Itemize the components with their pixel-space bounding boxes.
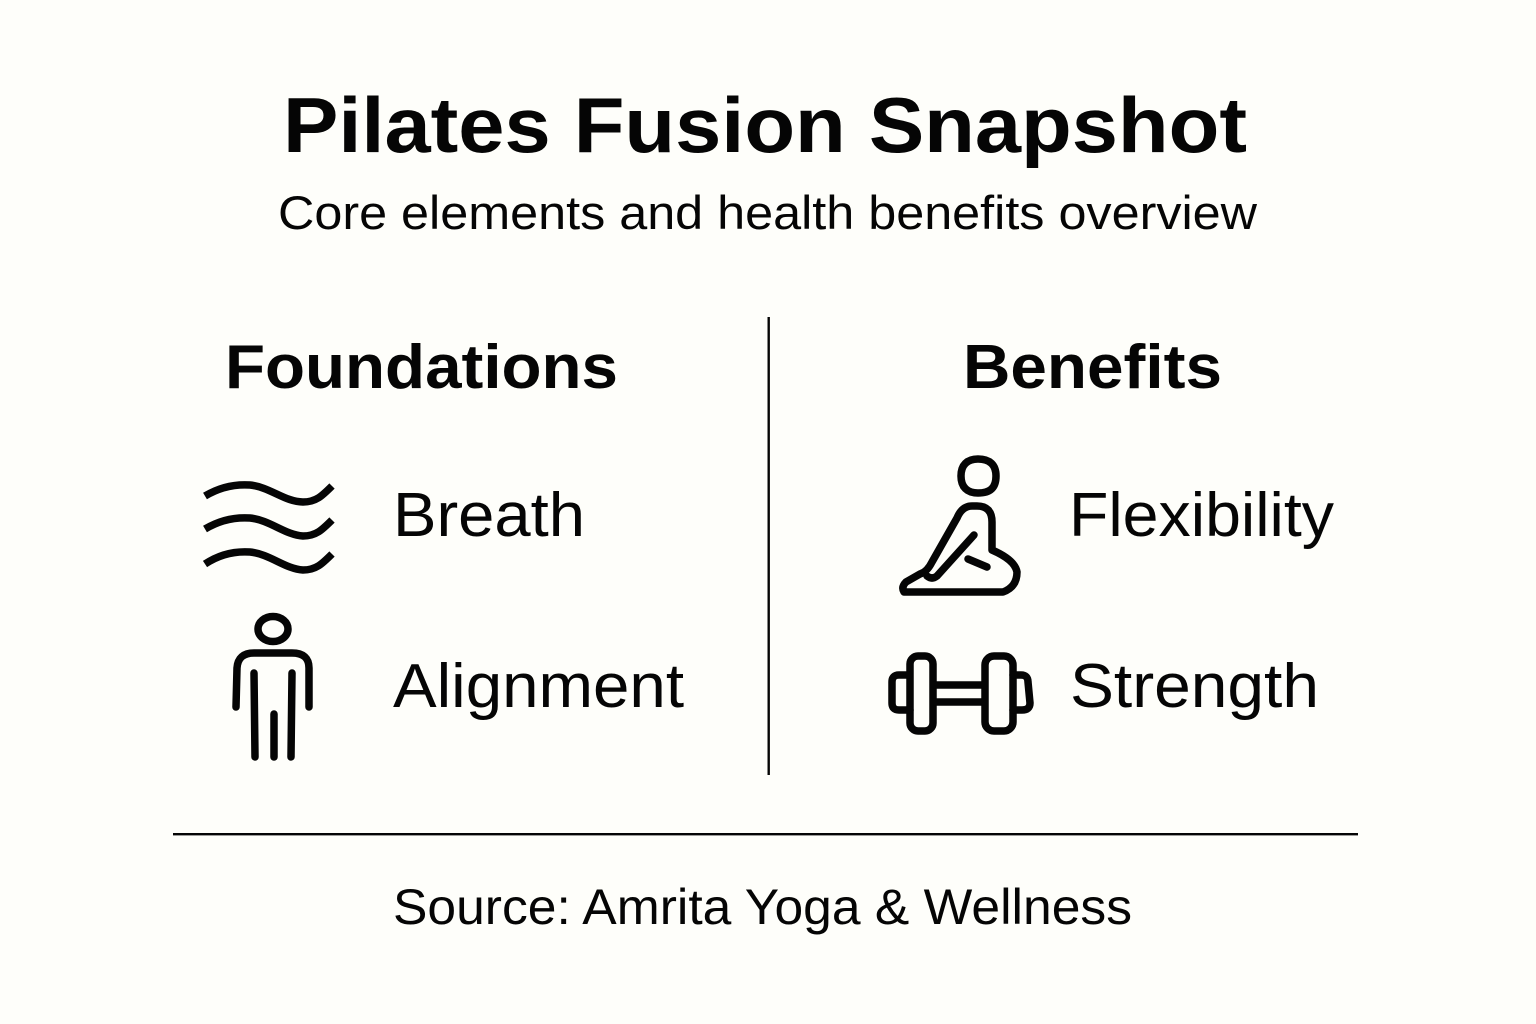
label: flexibility: Flexibility (1069, 481, 1334, 550)
source note: Source: Amrita Yoga & Wellness (393, 879, 1132, 935)
label: breath: Breath (393, 481, 585, 550)
subtitle: Core elements and health benefits overview (278, 186, 1258, 239)
icon: strength dumbbell (892, 656, 1030, 731)
heading: benefits: Benefits (963, 333, 1222, 402)
icon: breath waves (205, 485, 332, 570)
heading: foundations: Foundations (225, 333, 618, 402)
panel: benefits (892, 333, 1334, 731)
panel: foundations (205, 333, 684, 757)
label: alignment: Alignment (393, 652, 684, 721)
title: Pilates Fusion Snapshot (283, 81, 1247, 169)
vertical divider (768, 317, 770, 775)
label: strength: Strength (1070, 652, 1319, 721)
icon: alignment figure (236, 616, 309, 757)
horizontal divider (173, 833, 1358, 835)
icon: flexibility seated figure (903, 459, 1017, 592)
